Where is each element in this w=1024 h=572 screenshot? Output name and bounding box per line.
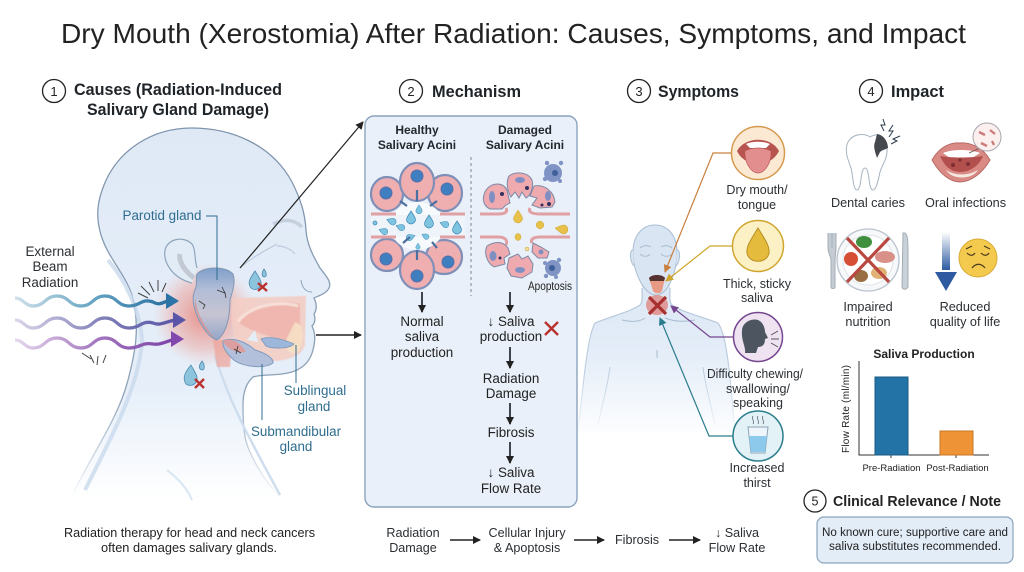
impact: reduced quality of life: Reduced	[940, 300, 990, 314]
impact: dental caries: Dental caries	[831, 196, 905, 210]
symptom: increased thirst: thirst	[743, 476, 771, 490]
panel: causes	[15, 80, 346, 555]
bar chart: saliva production: Pre-Radiation	[862, 463, 921, 474]
damaged acini	[480, 161, 572, 293]
heading: symptoms: Symptoms	[658, 83, 739, 101]
damaged flow: production	[480, 329, 542, 344]
gland labels: gland	[280, 439, 312, 454]
panel: impact	[828, 80, 1006, 474]
damaged flow: Fibrosis	[488, 425, 535, 440]
mechanism pathway caption: Fibrosis	[615, 533, 659, 547]
note text: saliva substitutes recommended.	[829, 541, 1001, 553]
impact: dental caries	[831, 119, 905, 210]
damaged flow: ↓ Saliva	[488, 465, 535, 480]
mechanism pathway caption: Damage	[389, 541, 437, 555]
mechanism pathway caption	[386, 526, 765, 555]
label: external beam radiation: Beam	[33, 259, 67, 274]
healthy flow	[391, 292, 453, 360]
note text: No known cure; supportive care and	[822, 527, 1008, 539]
column labels: Salivary Acini	[486, 138, 564, 152]
impact: reduced quality of life	[930, 232, 1000, 329]
face details	[273, 220, 302, 227]
symptom: dry mouth: Dry mouth/	[726, 183, 788, 197]
symptom: difficulty chewing	[707, 312, 804, 410]
impact: impaired nutrition: Impaired	[843, 300, 893, 314]
causes caption: Radiation therapy for head and neck cancers	[64, 525, 315, 540]
panel: clinical relevance	[804, 490, 1013, 563]
bar chart: saliva production: Post-Radiation	[926, 463, 989, 474]
note box	[817, 517, 1013, 563]
ear	[165, 239, 197, 283]
note text	[822, 527, 1008, 553]
healthy flow: saliva	[405, 329, 440, 344]
mechanism box	[365, 116, 577, 507]
column labels: Salivary Acini	[378, 138, 456, 152]
healthy acini	[371, 163, 465, 289]
heading: causes: Salivary Gland Damage)	[87, 101, 269, 119]
parotid gland	[193, 268, 234, 340]
bar chart: saliva production	[841, 347, 989, 474]
impact: oral infections: Oral infections	[925, 196, 1006, 210]
label: external beam radiation	[22, 244, 78, 290]
impact: reduced quality of life: quality of life	[930, 315, 1000, 329]
causes caption	[64, 525, 315, 555]
symptom: increased thirst	[730, 411, 784, 490]
bar chart: saliva production: Flow Rate (ml/min)	[841, 365, 852, 453]
open mouth and tongue	[649, 275, 665, 293]
impact: impaired nutrition: nutrition	[845, 315, 891, 329]
healthy flow: Normal	[400, 314, 444, 329]
sublingual gland	[261, 338, 294, 348]
heading: causes: 1	[50, 84, 58, 99]
gland labels: Submandibular	[251, 424, 342, 439]
heading: symptoms	[628, 80, 739, 102]
gland labels: Sublingual	[284, 383, 346, 398]
symptom: difficulty chewing: swallowing/	[726, 382, 790, 396]
heading: impact: 4	[867, 84, 875, 99]
mechanism pathway caption: Flow Rate	[709, 541, 765, 555]
heading: mechanism: Mechanism	[432, 83, 521, 101]
radiation beams	[15, 280, 186, 365]
mechanism pathway caption: & Apoptosis	[494, 541, 560, 555]
bar: pre-radiation	[875, 377, 908, 455]
heading: symptoms: 3	[635, 84, 643, 99]
panel: mechanism	[365, 80, 765, 555]
damaged acini: Apoptosis	[528, 281, 572, 293]
gland labels	[123, 208, 346, 454]
healthy flow: production	[391, 345, 453, 360]
arrow: head to mechanism upper	[240, 122, 363, 268]
heading: causes	[42, 80, 282, 119]
gland labels: Parotid gland	[123, 208, 201, 223]
throat with cross	[646, 295, 668, 315]
symptom: thick saliva: Thick, sticky	[723, 277, 792, 291]
mechanism pathway caption: Cellular Injury	[488, 526, 566, 540]
mechanism pathway caption: ↓ Saliva	[715, 526, 759, 540]
heading: mechanism	[400, 80, 521, 102]
heading: causes: Causes (Radiation-Induced	[74, 81, 282, 99]
column labels	[378, 123, 564, 152]
mechanism pathway caption: Radiation	[386, 526, 440, 540]
heading: impact: Impact	[891, 83, 944, 101]
symptom: difficulty chewing: Difficulty chewing/	[707, 367, 804, 381]
heading: clinical relevance: Clinical Relevance / Note	[833, 494, 1001, 510]
human torso illustration	[578, 225, 735, 432]
dry droplets	[184, 269, 266, 385]
bar chart: saliva production: Saliva Production	[873, 347, 975, 361]
radiation glow	[153, 263, 257, 367]
bar: post-radiation	[940, 431, 973, 455]
title: Dry Mouth (Xerostomia) After Radiation: Causes, Symptoms, and Impact	[61, 18, 966, 49]
heading: clinical relevance	[804, 490, 1001, 512]
symptom: thick saliva	[723, 220, 792, 305]
arrow: head to mechanism lower	[316, 334, 361, 336]
impact: impaired nutrition	[828, 229, 908, 329]
damaged flow: Radiation	[483, 371, 539, 386]
mouth cavity	[213, 296, 306, 367]
gland labels: gland	[298, 399, 330, 414]
label: external beam radiation: External	[25, 244, 75, 259]
label: external beam radiation: Radiation	[22, 275, 78, 290]
symptom: dry mouth	[726, 126, 788, 212]
heading: impact	[860, 80, 944, 102]
damaged flow	[480, 292, 558, 496]
symptom: difficulty chewing: speaking	[733, 396, 783, 410]
impact: oral infections	[925, 123, 1006, 210]
column labels: Damaged	[498, 123, 552, 137]
submandibular gland	[223, 330, 273, 367]
symptom: dry mouth: tongue	[738, 198, 776, 212]
causes caption: often damages salivary glands.	[101, 540, 277, 555]
damaged flow: ↓ Saliva	[488, 314, 535, 329]
heading: clinical relevance: 5	[812, 494, 819, 508]
heading: mechanism: 2	[407, 84, 415, 99]
symptom: thick saliva: saliva	[741, 291, 773, 305]
head and neck illustration	[70, 128, 330, 500]
symptom connectors	[660, 153, 733, 436]
panel: symptoms	[578, 80, 804, 490]
damaged flow: Damage	[486, 386, 536, 401]
damaged flow: Flow Rate	[481, 481, 541, 496]
column labels: Healthy	[395, 123, 439, 137]
symptom: increased thirst: Increased	[730, 461, 784, 475]
